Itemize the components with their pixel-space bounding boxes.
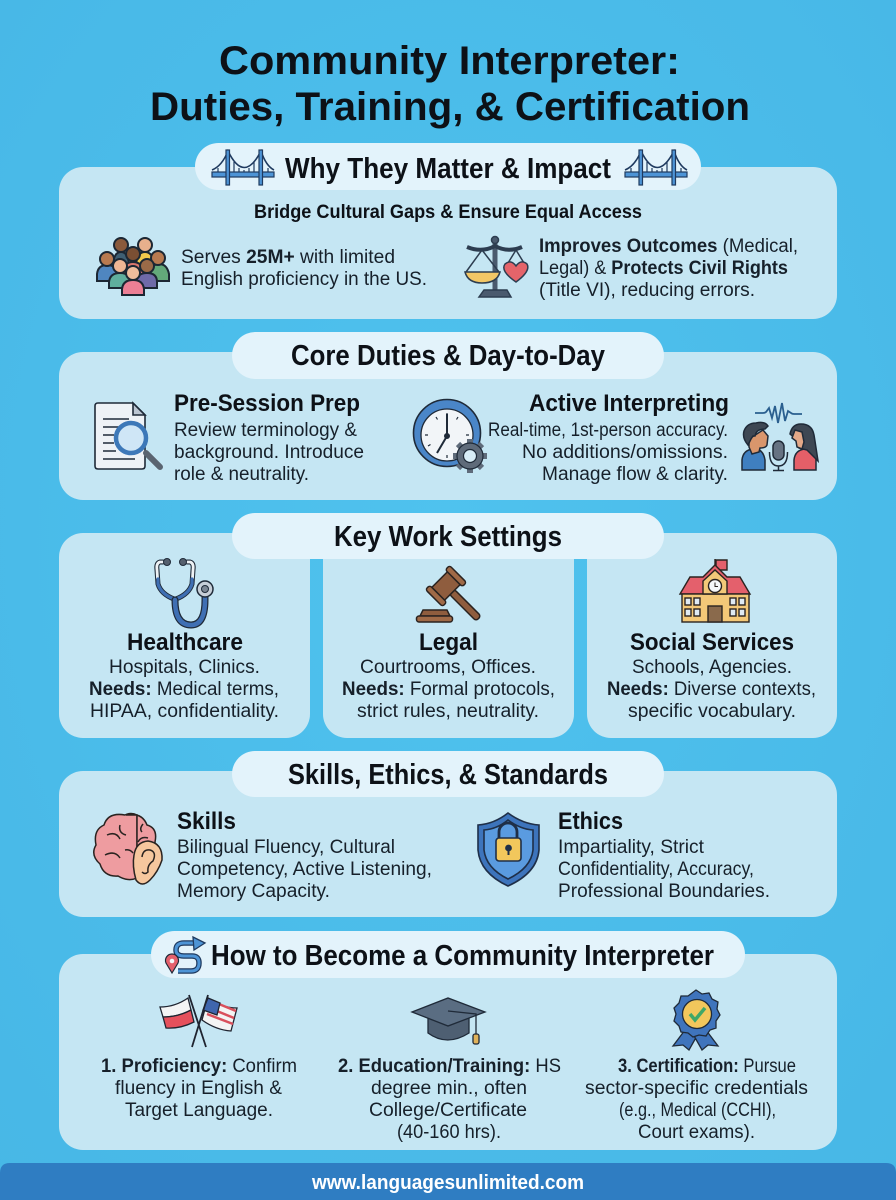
heading: how to become: [151, 931, 745, 978]
card: social services: [587, 533, 837, 738]
title: [150, 39, 750, 129]
text: skills: Competency, Active Listening,: [177, 859, 432, 880]
footer bar: www.languagesunlimited.com: [311, 1172, 584, 1194]
text: skills: Memory Capacity.: [177, 881, 330, 902]
icon: bridge right: [625, 150, 687, 185]
text: pre-session prep: Pre-Session Prep: [174, 390, 360, 417]
text: active interpreting: Active Interpreting: [529, 390, 729, 417]
text: social services: [607, 629, 816, 722]
icon: two speakers with microphone: [742, 403, 818, 471]
text: healthcare: [89, 629, 279, 722]
text: active interpreting: Real-time, 1st-person accuracy.: [488, 420, 728, 441]
text: ethics: Impartiality, Strict: [558, 837, 705, 858]
text: improves outcomes: Improves Outcomes (Medical,: [539, 236, 798, 257]
panel: core duties: [59, 332, 837, 500]
icon: scale with heart: [465, 236, 528, 297]
text: active interpreting: [488, 390, 729, 485]
panel: how to become: [59, 931, 837, 1150]
text: serves 25M+: [181, 247, 427, 290]
text: step 2: College/Certificate: [369, 1100, 527, 1121]
heading: core duties: Core Duties & Day-to-Day: [291, 340, 605, 372]
text: pre-session prep: Review terminology &: [174, 420, 357, 441]
heading: why they matter: [195, 143, 701, 190]
heading: why they matter: Why They Matter & Impact: [285, 153, 611, 185]
icon: brain with ear: [94, 814, 162, 884]
text: social services: Needs: Diverse contexts,: [607, 679, 816, 700]
icon: crossed flags: [160, 995, 237, 1047]
text: active interpreting: No additions/omissions.: [522, 442, 728, 463]
text: ethics: Professional Boundaries.: [558, 881, 770, 902]
heading: key work settings: [232, 513, 664, 559]
text: ethics: Ethics: [558, 808, 623, 835]
text: pre-session prep: [174, 390, 364, 485]
text: serves 25M+: English proficiency in the US.: [181, 269, 427, 290]
heading: key work settings: Key Work Settings: [334, 521, 562, 553]
text: ethics: [558, 808, 770, 902]
icon: route with arrow: [165, 937, 205, 973]
icon: certification badge: [673, 990, 720, 1050]
title: Duties, Training, & Certification: [150, 85, 750, 129]
text: step 3: sector-specific credentials: [585, 1078, 808, 1099]
heading: core duties: [232, 332, 664, 379]
card: healthcare: [59, 533, 310, 738]
heading: how to become: How to Become a Community Interpreter: [211, 940, 714, 972]
card: legal: [323, 533, 574, 738]
panel: why they matter: [59, 143, 837, 319]
text: improves outcomes: Legal) & Protects Civil Rights: [539, 258, 788, 279]
text: step 3: (e.g., Medical (CCHI),: [619, 1100, 776, 1121]
text: step 2: (40-160 hrs).: [397, 1122, 501, 1143]
text: social services: specific vocabulary.: [628, 701, 796, 722]
text: healthcare: Hospitals, Clinics.: [109, 657, 260, 678]
icon: gavel: [416, 565, 491, 631]
text: skills: Skills: [177, 808, 236, 835]
text: step 2: [338, 1056, 561, 1143]
text: step 3: [585, 1056, 808, 1143]
text: healthcare: Healthcare: [127, 629, 243, 656]
icon: bridge left: [212, 150, 274, 185]
text: legal: Legal: [419, 629, 478, 656]
text: step 3: Court exams).: [638, 1122, 755, 1143]
text: improves outcomes: (Title VI), reducing errors.: [539, 280, 755, 301]
icon: shield with lock: [478, 813, 539, 886]
text: healthcare: HIPAA, confidentiality.: [90, 701, 279, 722]
subheading: Bridge Cultural Gaps & Ensure Equal Access: [254, 202, 642, 223]
title: Community Interpreter:: [219, 39, 680, 83]
text: improves outcomes: [539, 236, 798, 301]
text: pre-session prep: role & neutrality.: [174, 464, 309, 485]
text: skills: Bilingual Fluency, Cultural: [177, 837, 395, 858]
text: active interpreting: Manage flow & clarity.: [542, 464, 728, 485]
text: serves 25M+: Serves 25M+ with limited: [181, 247, 395, 268]
icon: document with magnifier: [95, 403, 160, 469]
icon: stethoscope: [157, 558, 213, 625]
icon: graduation cap: [412, 998, 485, 1044]
text: ethics: Confidentiality, Accuracy,: [558, 859, 754, 880]
icon: clock with gear: [414, 400, 487, 473]
text: step 1: [101, 1056, 297, 1121]
heading: skills, ethics, standards: Skills, Ethics, & Standards: [288, 759, 608, 791]
text: legal: Needs: Formal protocols,: [342, 679, 555, 700]
icon: crowd of people: [97, 238, 169, 295]
text: healthcare: Needs: Medical terms,: [89, 679, 279, 700]
text: step 3: 3. Certification: Pursue: [618, 1056, 796, 1077]
heading: skills, ethics, standards: [232, 751, 664, 797]
footer bar: [0, 1163, 896, 1200]
text: step 2: degree min., often: [371, 1078, 527, 1099]
icon: school building: [680, 559, 750, 622]
section: key work settings: [59, 513, 837, 738]
text: step 1: 1. Proficiency: Confirm: [101, 1056, 297, 1077]
text: step 1: fluency in English &: [115, 1078, 282, 1099]
text: step 1: Target Language.: [125, 1100, 273, 1121]
text: social services: Schools, Agencies.: [632, 657, 792, 678]
text: legal: strict rules, neutrality.: [357, 701, 539, 722]
text: step 2: 2. Education/Training: HS: [338, 1056, 561, 1077]
text: skills: [177, 808, 432, 902]
text: social services: Social Services: [630, 629, 794, 656]
panel: skills and ethics: [59, 751, 837, 917]
text: pre-session prep: background. Introduce: [174, 442, 364, 463]
text: legal: [342, 629, 555, 722]
text: legal: Courtrooms, Offices.: [360, 657, 536, 678]
